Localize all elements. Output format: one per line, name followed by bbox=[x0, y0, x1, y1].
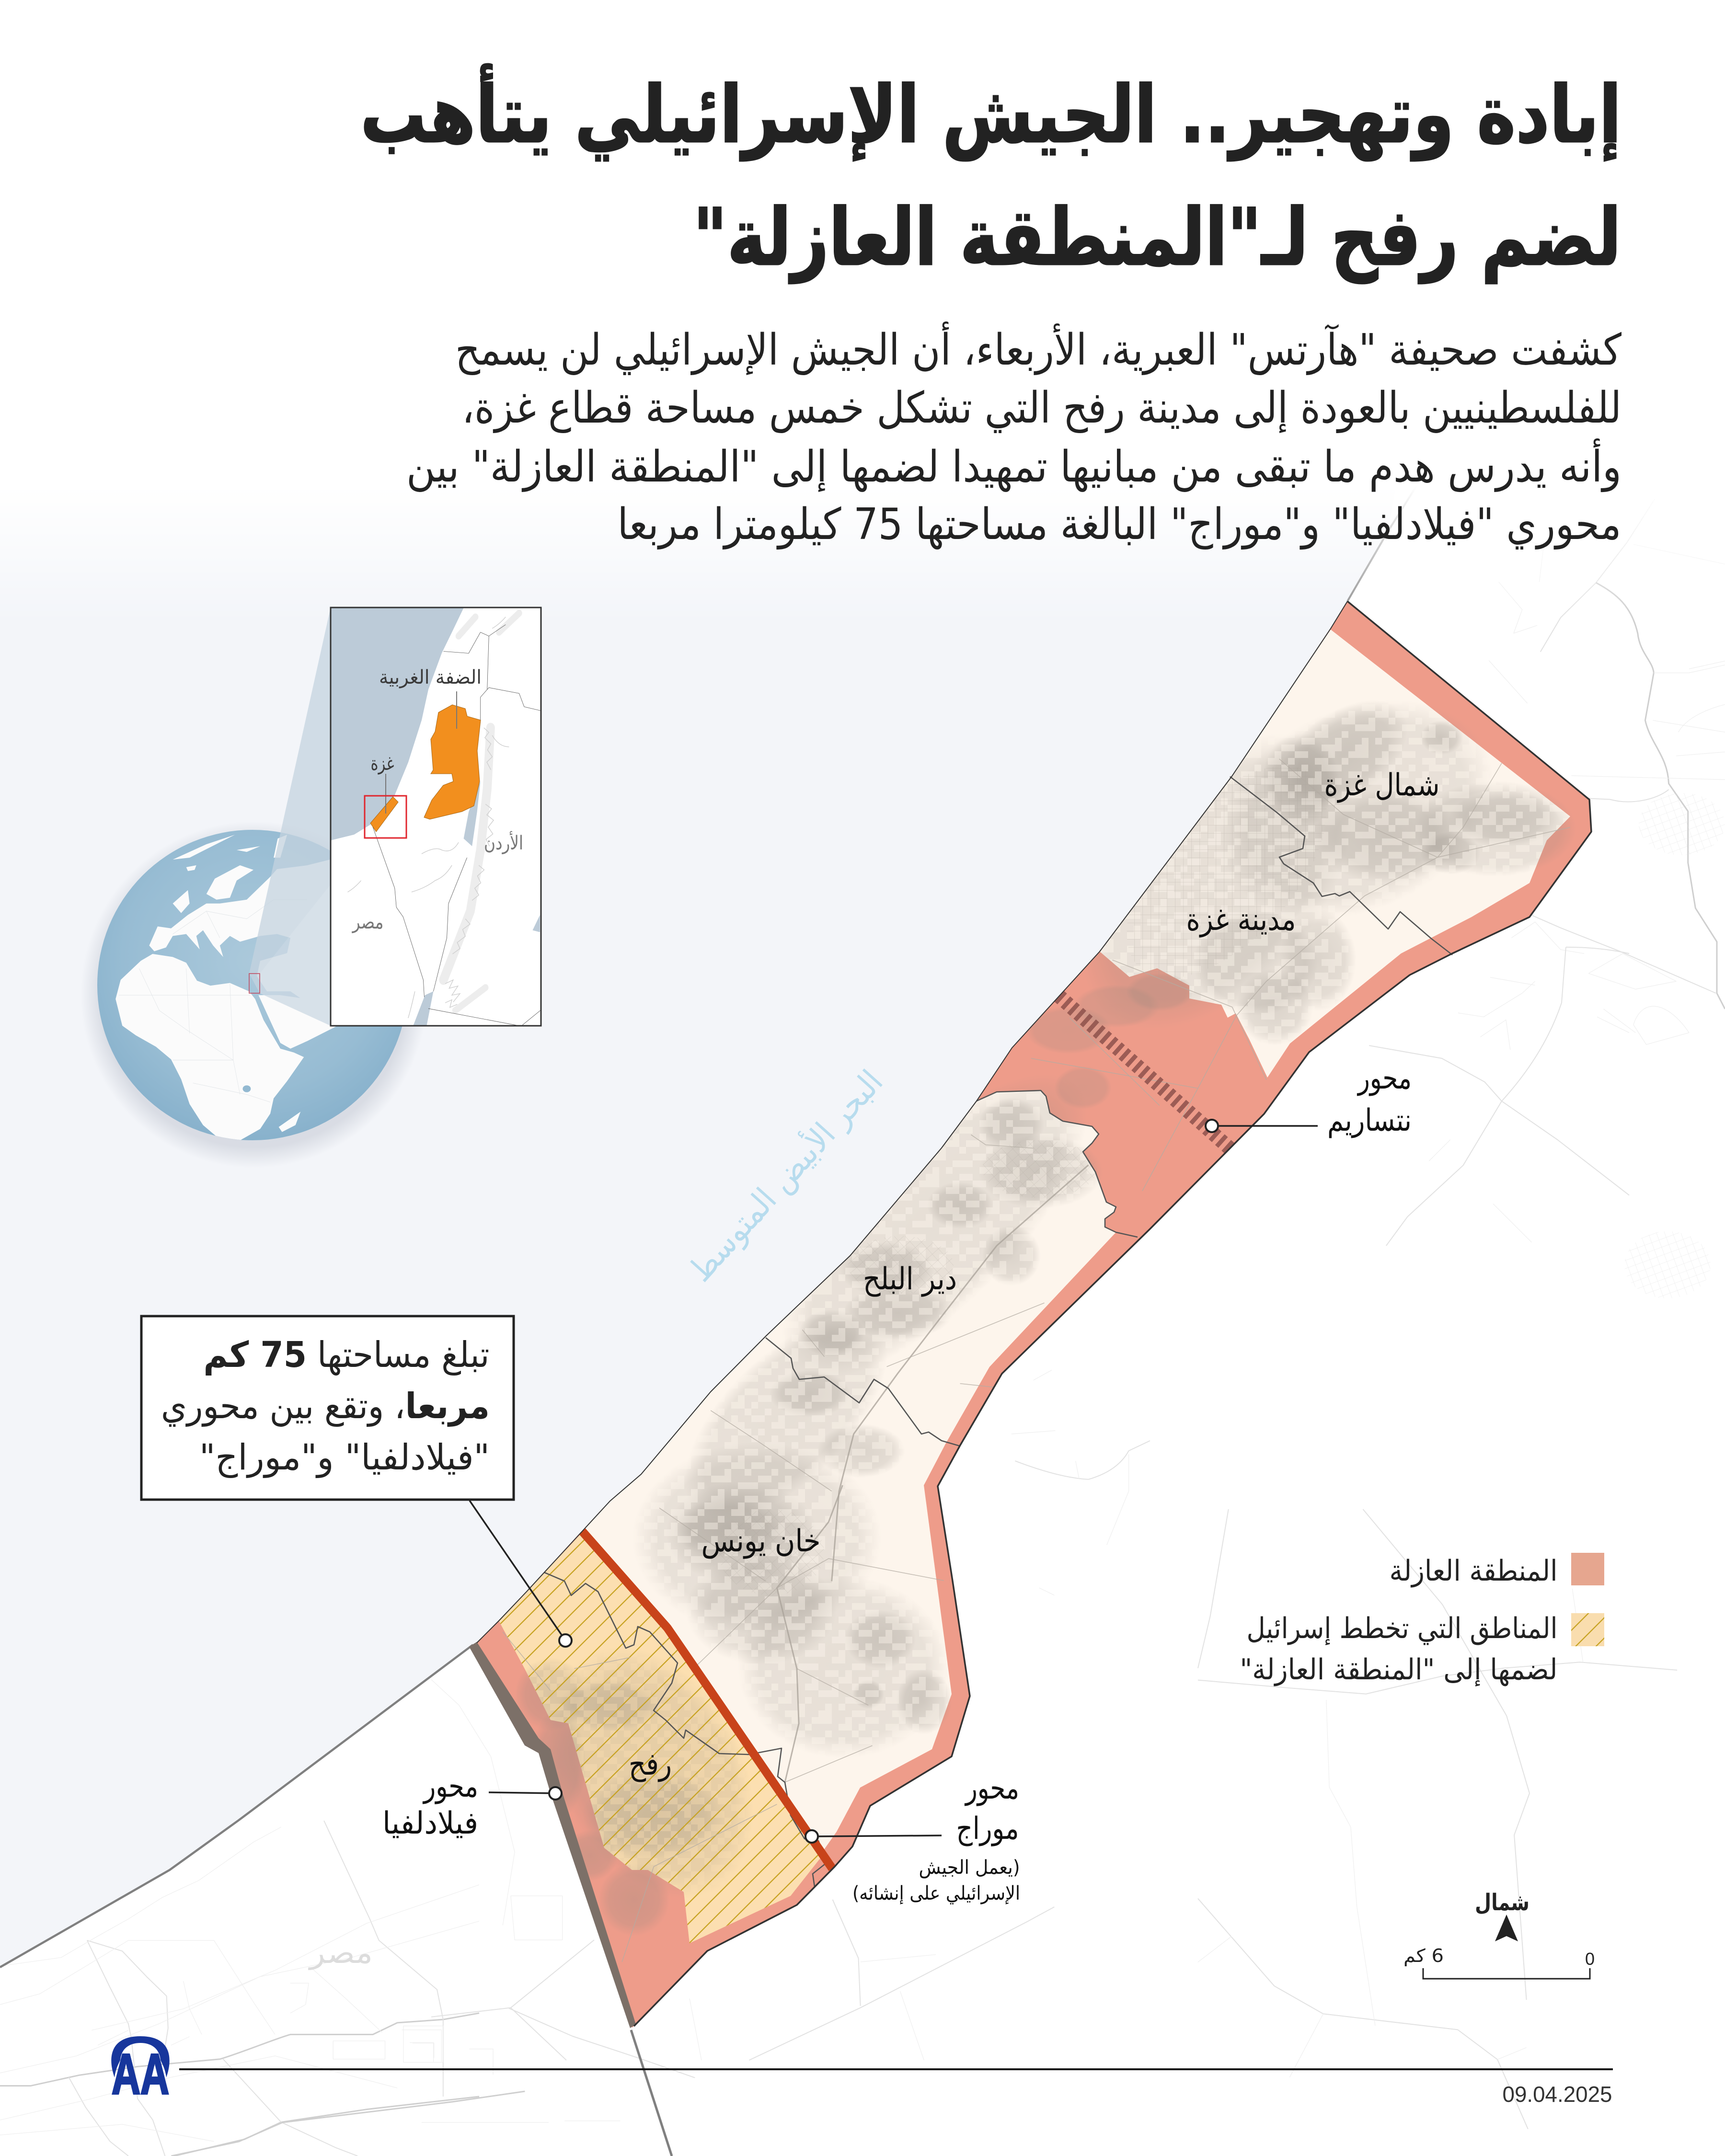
callout box: 75 square km: "فيلادلفيا" و"موراج" bbox=[199, 1437, 490, 1478]
Netzarim corridor bbox=[1059, 996, 1232, 1150]
logo: Anadolu Agency: AA bbox=[112, 2042, 169, 2106]
sea label: البحر الأبيض المتوسط bbox=[680, 1062, 890, 1289]
city street grids bbox=[719, 731, 1363, 1595]
West Bank bbox=[424, 705, 481, 819]
callout: Morag corridor bbox=[805, 1771, 1020, 1904]
built-up areas: broad wash bbox=[508, 658, 1576, 1934]
pixel texture over central and south Gaza bbox=[582, 1090, 1116, 1849]
Gaza bbox=[370, 797, 398, 832]
callout box: 75 square km: تبلغ مساحتها 75 كم bbox=[203, 1334, 489, 1376]
south-west road network bbox=[0, 1821, 479, 2156]
globe shadow bbox=[80, 821, 427, 1168]
Morag corridor line bbox=[582, 1531, 832, 1869]
central and south Gaza area bbox=[582, 1090, 1116, 1849]
Rafah annexation area bbox=[499, 1535, 821, 1943]
date: 09.04.2025 bbox=[1503, 2082, 1612, 2107]
callout: Netzarim corridor: نتساريم bbox=[1327, 1103, 1412, 1138]
road network east of the strip bbox=[0, 499, 1725, 2156]
intro text: للفلسطينيين بالعودة إلى مدينة رفح التي تشكل خمس مساحة قطاع غزة، bbox=[462, 383, 1622, 434]
inset country borders bbox=[373, 625, 540, 1026]
pixel texture over north Gaza bbox=[1100, 630, 1570, 1078]
inset label: West Bank: الضفة الغربية bbox=[379, 666, 482, 688]
inset water bodies bbox=[413, 781, 540, 1026]
buffer zone bbox=[473, 601, 1591, 2028]
Gaza locator box bbox=[365, 796, 406, 838]
legend: المنطقة العازلة bbox=[1390, 1554, 1557, 1588]
label: North Gaza: شمال غزة bbox=[1324, 768, 1439, 803]
callout: Morag corridor: موراج bbox=[956, 1811, 1019, 1846]
terrain shading bbox=[443, 613, 519, 1010]
label: Rafah: رفح bbox=[629, 1747, 672, 1782]
inset sea bbox=[331, 608, 464, 840]
wedge linking globe to inset bbox=[249, 608, 331, 1026]
intro text: كشفت صحيفة "هآرتس" العبرية، الأربعاء، أن الجيش الإسرائيلي لن يسمح bbox=[455, 321, 1622, 376]
inset leader lines bbox=[386, 691, 457, 814]
hatching bbox=[499, 1535, 821, 1943]
title bbox=[360, 64, 1622, 284]
legend: لضمها إلى "المنطقة العازلة" bbox=[1240, 1653, 1557, 1686]
legend bbox=[1240, 1553, 1604, 1686]
scale bar: 0 bbox=[1585, 1949, 1595, 1969]
north arrow: شمال bbox=[1475, 1889, 1530, 1916]
logo: Anadolu Agency bbox=[111, 2036, 170, 2106]
callout: Netzarim corridor: محور bbox=[1357, 1061, 1412, 1096]
intro text bbox=[406, 321, 1622, 550]
scale bar: 6 كم bbox=[1403, 1945, 1444, 1966]
intro text: وأنه يدرس هدم ما تبقى من مبانيها تمهيدا لضمها إلى "المنطقة العازلة" بين bbox=[406, 438, 1622, 493]
Philadelphi corridor bbox=[469, 1642, 636, 2028]
coastline and borders outside the strip bbox=[0, 460, 1433, 2156]
continents bbox=[115, 835, 337, 1140]
callout: Morag corridor: (يعمل الجيش bbox=[919, 1857, 1020, 1879]
legend: المناطق التي تخطط إسرائيل bbox=[1247, 1612, 1557, 1645]
callout: Philadelphi corridor: فيلادلفيا bbox=[382, 1806, 478, 1841]
footer rule bbox=[179, 2068, 1613, 2070]
strip outline bbox=[477, 601, 1591, 2026]
built-up areas: dense cores bbox=[515, 678, 1560, 1936]
inset label: Egypt: مصر bbox=[352, 911, 383, 933]
inset label: Gaza: غزة bbox=[371, 753, 394, 775]
pixel texture over Rafah bbox=[499, 1535, 821, 1943]
intro text: محوري "فيلادلفيا" و"موراج" البالغة مساحتها 75 كيلومترا مربعا bbox=[617, 499, 1621, 550]
top fade to white bbox=[0, 0, 1725, 623]
legend swatch: buffer zone bbox=[1571, 1553, 1604, 1585]
callout box: 75 square km bbox=[141, 1316, 572, 1647]
inset map bbox=[331, 608, 541, 1026]
inset label: Jordan: الأردن bbox=[484, 831, 523, 854]
legend swatch: annexation area bbox=[1571, 1613, 1604, 1646]
callout box: 75 square km: مربعا، وتقع بين محوري bbox=[161, 1386, 490, 1427]
callout: Philadelphi corridor bbox=[382, 1769, 562, 1841]
faint towns bbox=[1639, 793, 1725, 855]
governorate borders bbox=[544, 777, 1452, 1887]
map: Gaza Strip bbox=[469, 601, 1591, 2028]
callout: Philadelphi corridor: محور bbox=[423, 1769, 478, 1804]
internal roads bbox=[503, 759, 1570, 1962]
globe locator box bbox=[249, 974, 260, 993]
north arrow bbox=[1475, 1889, 1530, 1941]
label: Egypt on main map: مصر bbox=[308, 1935, 373, 1970]
callout: Morag corridor: محور bbox=[965, 1771, 1019, 1806]
sea bbox=[0, 0, 1485, 1967]
north Gaza area bbox=[1100, 630, 1570, 1078]
label: Deir al-Balah: دير البلح bbox=[863, 1261, 957, 1297]
scale bar bbox=[1403, 1945, 1595, 1979]
callout: Netzarim corridor bbox=[1206, 1061, 1412, 1138]
lake bbox=[243, 1085, 251, 1092]
callout: Morag corridor: الإسرائيلي على إنشائه) bbox=[852, 1882, 1020, 1904]
globe bbox=[97, 830, 408, 1140]
label: Khan Younis: خان يونس bbox=[702, 1524, 820, 1559]
label: Gaza City: مدينة غزة bbox=[1186, 902, 1296, 938]
